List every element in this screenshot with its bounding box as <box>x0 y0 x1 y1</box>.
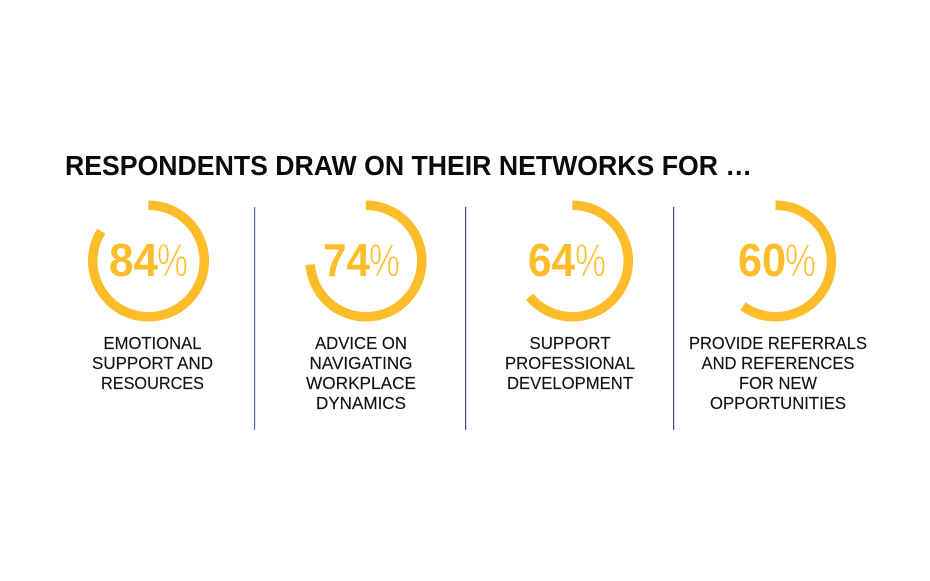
label: referrals: AND REFERENCES <box>702 353 854 373</box>
label: professional development: PROFESSIONAL <box>505 353 635 373</box>
divider 1 <box>254 207 255 430</box>
label: professional development: DEVELOPMENT <box>507 373 633 393</box>
label: referrals: OPPORTUNITIES <box>710 393 846 413</box>
title: RESPONDENTS DRAW ON THEIR NETWORKS FOR … <box>65 150 752 181</box>
label: referrals: PROVIDE REFERRALS <box>689 333 867 353</box>
panel: referrals 60% <box>689 205 867 413</box>
donut chart: 64% <box>517 205 628 317</box>
value: 60%: % <box>785 234 816 286</box>
value: 74%: 74 <box>323 234 370 286</box>
label: emotional support: RESOURCES <box>101 373 204 393</box>
label: emotional support: SUPPORT AND <box>92 353 213 373</box>
value: 64%: 64 <box>528 234 575 286</box>
panel: workplace advice 74% <box>306 205 422 413</box>
value: 60%: 60 <box>738 234 786 286</box>
label: workplace advice: DYNAMICS <box>316 393 406 413</box>
value: 64%: % <box>575 234 606 286</box>
panel: emotional support 84% <box>92 205 213 393</box>
donut chart: 60% <box>720 205 832 317</box>
label: professional development: SUPPORT <box>530 333 611 353</box>
label: workplace advice: WORKPLACE <box>306 373 416 393</box>
value: 84%: % <box>157 234 188 286</box>
divider 3 <box>673 207 674 430</box>
value: 84%: 84 <box>109 234 158 286</box>
value: 74%: % <box>369 234 400 286</box>
label: emotional support: EMOTIONAL <box>104 333 202 353</box>
panel: professional development 64% <box>505 205 635 393</box>
label: workplace advice: NAVIGATING <box>310 353 412 373</box>
divider 2 <box>465 207 466 430</box>
label: referrals: FOR NEW <box>739 373 817 393</box>
donut chart: 74% <box>310 205 422 317</box>
donut chart: 84% <box>93 205 204 317</box>
label: workplace advice: ADVICE ON <box>315 333 407 353</box>
